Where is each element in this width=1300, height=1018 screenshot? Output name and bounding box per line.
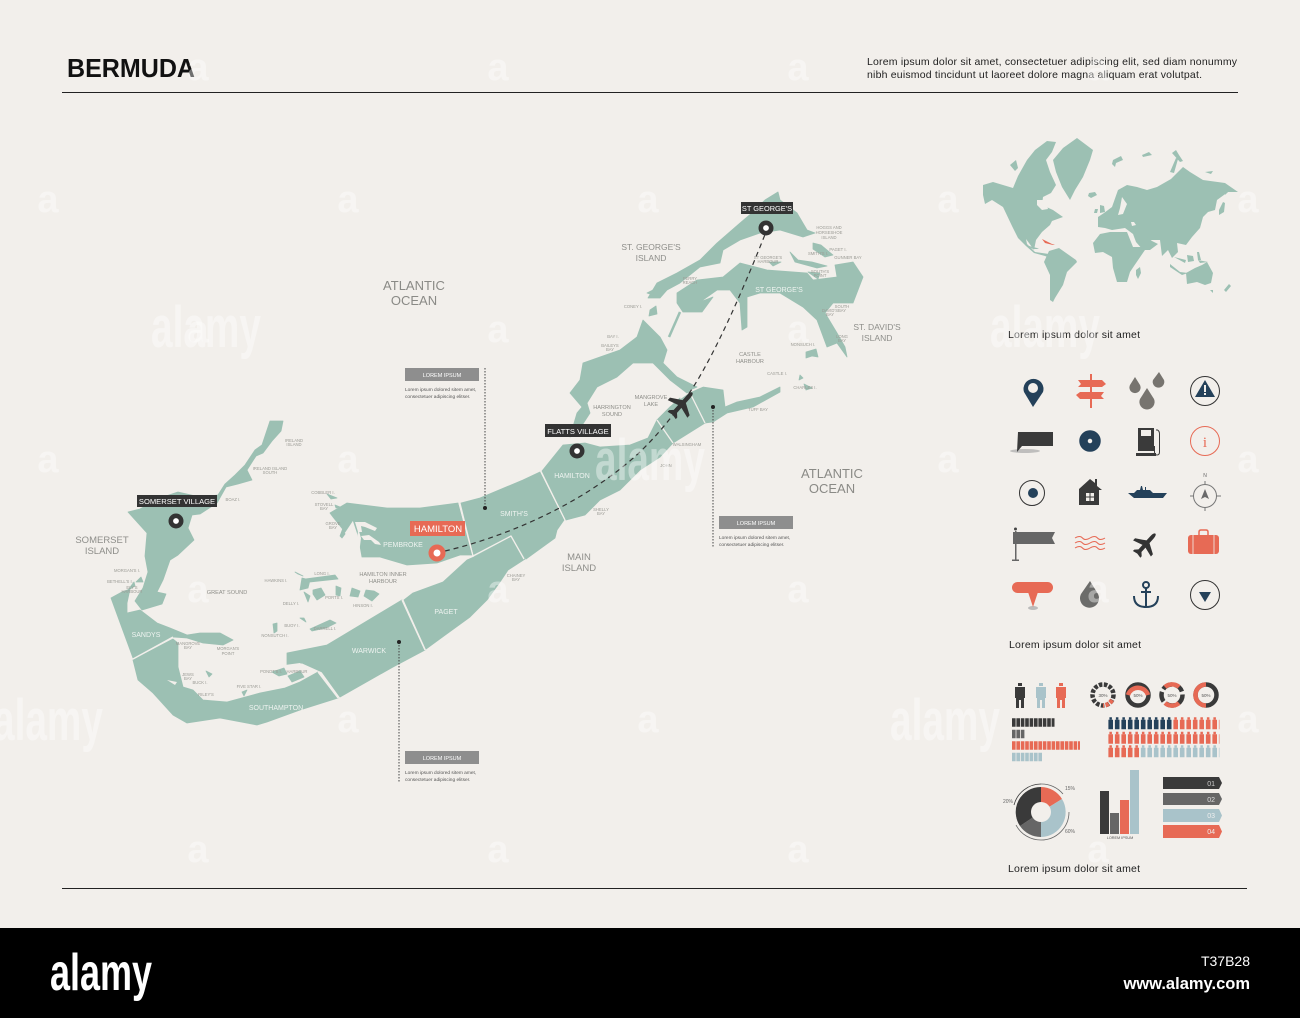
icon: airplane xyxy=(662,384,702,424)
map labels: ATLANTIC xyxy=(801,466,863,481)
watermarks: a xyxy=(37,179,59,221)
map labels: IRELAND xyxy=(285,438,303,443)
callout: upper: consectetuer adipiscing elitser. xyxy=(405,394,470,400)
map labels: BAY xyxy=(606,347,614,352)
small islands xyxy=(128,243,833,697)
icon: map pointer xyxy=(1012,582,1053,610)
map labels: TUFF BAY xyxy=(748,407,768,412)
watermarks: a xyxy=(1087,47,1109,89)
watermarks: a xyxy=(487,569,509,611)
watermarks: a xyxy=(187,569,209,611)
watermarks: a xyxy=(937,179,959,221)
region: Somerset and Ireland Island xyxy=(128,421,283,610)
region: Smith's xyxy=(461,472,564,559)
infographics: 50% xyxy=(1133,693,1143,698)
map labels: RILEY'S xyxy=(198,692,214,697)
callout: lower: Lorem ipsum dolored sitem amet, xyxy=(405,770,476,776)
map labels: CASTLE I. xyxy=(767,371,787,376)
icon: speech banner xyxy=(1010,432,1053,453)
icon grid xyxy=(1010,372,1221,610)
infographics caption: Lorem ipsum dolor sit amet xyxy=(1008,863,1140,875)
map labels: CHAINEY xyxy=(507,573,526,578)
map labels: MORGAN'S xyxy=(217,646,239,651)
watermarks: a xyxy=(487,829,509,871)
icon: ship xyxy=(1128,486,1167,498)
map labels: BAY I. xyxy=(607,334,619,339)
map labels: BETHELL'S I. xyxy=(107,579,133,584)
callout: right: LOREM IPSUM xyxy=(737,521,776,527)
map labels: LONG I. xyxy=(314,571,330,576)
map labels: ST. DAVID'S xyxy=(853,322,901,332)
callout: upper xyxy=(405,368,487,510)
map labels: SOUTH xyxy=(835,304,849,309)
header description xyxy=(867,56,1238,81)
map labels: SOUTH xyxy=(263,470,277,475)
callout: right: consectetuer adipiscing elitser. xyxy=(719,542,784,548)
region: Warwick xyxy=(287,600,425,697)
map labels: PONDT'S I. xyxy=(260,669,282,674)
map labels: BAY xyxy=(320,506,328,511)
map labels: OCEAN xyxy=(391,293,437,308)
watermarks: a xyxy=(187,47,209,89)
callout: lower: consectetuer adipiscing elitser. xyxy=(405,777,470,783)
watermarks: a xyxy=(1237,699,1259,741)
map labels: GROVE xyxy=(325,521,341,526)
icon: location pin xyxy=(1024,379,1044,407)
map labels: ISLAND xyxy=(821,235,837,240)
watermarks: a xyxy=(787,309,809,351)
infographics: 50% xyxy=(1167,693,1177,698)
map labels: BAY xyxy=(512,577,520,582)
map labels: FERRY xyxy=(683,276,697,281)
watermarks: a xyxy=(187,309,209,351)
map labels: ST. GEORGE'S xyxy=(621,242,681,252)
marker: St George's xyxy=(741,202,793,233)
map labels: MAIN xyxy=(567,552,591,563)
watermarks: a xyxy=(487,47,509,89)
map labels: HARBOUR xyxy=(287,669,307,674)
map labels: SMITH'S xyxy=(500,511,528,518)
map labels: GREAT SOUND xyxy=(207,590,247,596)
watermarks: a xyxy=(487,309,509,351)
map labels: SOUTHAMPTON xyxy=(249,705,303,712)
map labels: HARBOUR xyxy=(122,589,142,594)
arrow list: 02 xyxy=(1207,797,1215,804)
callout: upper: LOREM IPSUM xyxy=(423,373,462,379)
map labels: ISLAND xyxy=(636,253,666,263)
map labels: JEWS xyxy=(182,672,194,677)
map labels: OCEAN xyxy=(809,481,855,496)
map labels: FIVE STAR I. xyxy=(237,684,261,689)
title: BERMUDA xyxy=(67,53,195,83)
map labels: IRELAND ISLAND xyxy=(253,466,287,471)
footer bar: T37B28 xyxy=(1201,953,1250,969)
marker: Hamilton capital: HAMILTON xyxy=(414,524,462,535)
map labels: HINSON I. xyxy=(353,603,373,608)
callout: lower xyxy=(397,640,479,783)
map labels: ST GEORGE'S xyxy=(755,287,803,294)
callout: upper: Lorem ipsum dolored sitem amet, xyxy=(405,387,476,393)
map labels: BAY xyxy=(838,338,846,343)
bar chart: LOREM IPSUM xyxy=(1107,836,1133,840)
people figures xyxy=(1015,683,1066,708)
world map xyxy=(983,138,1238,302)
icons caption: Lorem ipsum dolor sit amet xyxy=(1009,639,1141,651)
header description: Lorem ipsum dolor sit amet, consectetuer adipiscing elit, sed diam nonummy xyxy=(867,56,1238,68)
map labels: HARRINGTON xyxy=(593,405,631,411)
marker: Flatts Village: FLATTS VILLAGE xyxy=(547,427,609,436)
footer bar xyxy=(0,928,1300,1018)
map labels: ATLANTIC xyxy=(383,278,445,293)
infographics: 30% xyxy=(1098,693,1108,698)
map labels: BAY xyxy=(329,525,337,530)
icon: oil drop xyxy=(1080,581,1099,608)
map labels: MORGAN'S I. xyxy=(114,568,140,573)
watermarks: a xyxy=(1237,179,1259,221)
map labels: ELY'S xyxy=(126,585,138,590)
map labels: POINT xyxy=(222,651,235,656)
icon: waves xyxy=(1075,536,1105,550)
map labels: BAY xyxy=(597,511,605,516)
map labels: LONG xyxy=(836,334,848,339)
region: Tucker's Town peninsula xyxy=(648,387,780,457)
watermarks: a xyxy=(337,699,359,741)
pictogram bars xyxy=(1012,722,1080,757)
infographics: 50% xyxy=(1201,693,1211,698)
footer bar: www.alamy.com xyxy=(1122,975,1250,993)
bar chart xyxy=(1100,770,1139,840)
watermarks: a xyxy=(1237,439,1259,481)
watermarks: a xyxy=(337,439,359,481)
map labels: CHARLES I. xyxy=(793,385,817,390)
arrow list: 03 xyxy=(1207,813,1215,820)
map labels: DAVID'S xyxy=(822,308,838,313)
map labels: HORSESHOE xyxy=(816,230,843,235)
map labels: SOUND xyxy=(602,412,622,418)
watermarks: a xyxy=(787,569,809,611)
icon: target xyxy=(1020,480,1044,506)
icon: fuel pump xyxy=(1136,428,1160,456)
map labels: BAY xyxy=(838,308,846,313)
map labels: CONEY I. xyxy=(624,304,642,309)
watermarks xyxy=(0,47,1259,871)
callout: lower: LOREM IPSUM xyxy=(423,756,462,762)
map labels: ISLAND xyxy=(862,333,892,343)
watermarks: a xyxy=(187,829,209,871)
pie chart: 20% xyxy=(1003,799,1014,805)
map labels: HARBOUR xyxy=(736,359,764,365)
map labels: BAY xyxy=(184,676,192,681)
marker: Somerset Village: SOMERSET VILLAGE xyxy=(139,497,215,506)
map labels: BAY xyxy=(184,645,192,650)
callout: right xyxy=(711,405,793,548)
watermarks: a xyxy=(37,439,59,481)
map labels: MANGROVE xyxy=(635,395,668,401)
region: Hamilton north loop xyxy=(570,320,697,437)
map labels: ST GEORGE'S xyxy=(754,255,782,260)
map labels xyxy=(75,225,901,712)
watermarks: a xyxy=(337,179,359,221)
map labels: PAGET xyxy=(434,609,458,616)
percent donuts xyxy=(1092,684,1216,706)
region: Southampton xyxy=(133,639,338,725)
map of Bermuda xyxy=(111,192,863,725)
region: Sandys xyxy=(111,589,233,658)
map labels: NONSUCH I. xyxy=(791,342,815,347)
arrow list: 04 xyxy=(1207,829,1215,836)
watermarks: a xyxy=(937,439,959,481)
map labels: BAILEYS xyxy=(601,343,619,348)
map labels: REACH xyxy=(683,280,697,285)
marker: Hamilton capital xyxy=(410,521,465,559)
arrow list: 01 xyxy=(1207,781,1215,788)
map labels: ISLAND xyxy=(562,563,596,574)
arrow list xyxy=(1163,777,1222,838)
icon: info: i xyxy=(1203,435,1207,451)
map labels: SOMERSET xyxy=(75,535,129,546)
pie chart: 60% xyxy=(1065,829,1076,835)
footer bar: alamy xyxy=(50,944,152,1002)
marker: Flatts Village xyxy=(545,424,611,456)
map labels: PAGET I. xyxy=(829,247,847,252)
watermarks: a xyxy=(637,699,659,741)
watermarks: a xyxy=(787,47,809,89)
icon: warning xyxy=(1190,376,1220,406)
map labels: STOVELL xyxy=(315,502,334,507)
map labels: WARWICK xyxy=(352,648,386,655)
map labels: PORTS I. xyxy=(325,595,343,600)
marker: St George's: ST GEORGE'S xyxy=(742,204,792,213)
watermarks: a xyxy=(1087,569,1109,611)
map labels: HARBOUR xyxy=(369,579,397,585)
world map caption: Lorem ipsum dolor sit amet xyxy=(1008,329,1140,341)
icon: suitcase xyxy=(1188,530,1219,554)
map labels: SHELLY xyxy=(593,507,609,512)
map labels: NONSUTCH I. xyxy=(261,633,289,638)
map labels: BAY xyxy=(826,312,834,317)
region: Pembroke xyxy=(330,503,472,565)
map labels: DELLY I. xyxy=(283,601,299,606)
map labels: CASTLE xyxy=(739,352,761,358)
map labels: PEMBROKE xyxy=(383,542,423,549)
icon: plane xyxy=(1128,526,1164,562)
icon: down arrow xyxy=(1190,580,1220,610)
icon: compass xyxy=(1190,473,1221,511)
flight route xyxy=(445,232,766,551)
header description: nibh euismod tincidunt ut laoreet dolore magna aliquam erat volutpat. xyxy=(867,69,1202,81)
marker: Somerset Village xyxy=(137,495,217,526)
watermarks: alamy xyxy=(595,428,705,493)
people grid xyxy=(1108,718,1219,752)
watermarks: alamy xyxy=(890,688,1000,753)
map labels: HAMILTON INNER xyxy=(359,572,407,578)
icon: compass: N xyxy=(1203,473,1207,479)
map labels: MANGROVE xyxy=(176,641,200,646)
map labels: SOUTH'S xyxy=(811,269,829,274)
map labels: COBBLER I. xyxy=(311,490,335,495)
inlets xyxy=(154,522,381,685)
map labels: SMITH'S I. xyxy=(808,251,828,256)
map labels: SANDYS xyxy=(132,632,161,639)
map labels: BOAZ I. xyxy=(226,497,240,502)
icon: house xyxy=(1079,479,1102,505)
pie chart xyxy=(1003,784,1076,840)
region: St George's xyxy=(677,262,863,357)
map labels: HAMILTON xyxy=(554,473,590,480)
map labels: DARRELL I. xyxy=(314,626,336,631)
map labels: ISLAND xyxy=(286,442,302,447)
pie chart: 15% xyxy=(1065,786,1076,792)
infographics xyxy=(1003,683,1222,840)
region: Paget xyxy=(404,537,525,649)
map labels: HAWKINS I. xyxy=(265,578,287,583)
map labels: POINT xyxy=(814,273,827,278)
map labels: HOGGS AND xyxy=(816,225,842,230)
watermarks: a xyxy=(637,179,659,221)
watermarks: a xyxy=(787,829,809,871)
map labels: HARBOUR xyxy=(758,259,778,264)
icon: info xyxy=(1190,426,1220,456)
region: St George's Island xyxy=(648,192,815,298)
map labels: BUOY I. xyxy=(284,623,300,628)
region: Hamilton xyxy=(542,398,680,520)
parish boundaries xyxy=(133,386,705,698)
icon: signpost xyxy=(1076,374,1106,408)
watermarks: a xyxy=(1087,829,1109,871)
icon: drops xyxy=(1129,372,1164,410)
map labels: BUCK I. xyxy=(192,680,208,685)
map labels: JOHN xyxy=(660,463,672,468)
callout: right: Lorem ipsum dolored sitem amet, xyxy=(719,535,790,541)
icon: flag xyxy=(1012,528,1055,561)
map labels: WALSINGHAM xyxy=(673,442,702,447)
icon: anchor xyxy=(1134,582,1158,607)
map labels: ISLAND xyxy=(85,546,119,557)
watermarks: alamy xyxy=(990,295,1100,360)
watermarks: alamy xyxy=(151,295,261,360)
icon: dot xyxy=(1084,434,1096,448)
map labels: GUNNER BAY xyxy=(834,255,862,260)
map labels: LAKE xyxy=(644,402,658,408)
